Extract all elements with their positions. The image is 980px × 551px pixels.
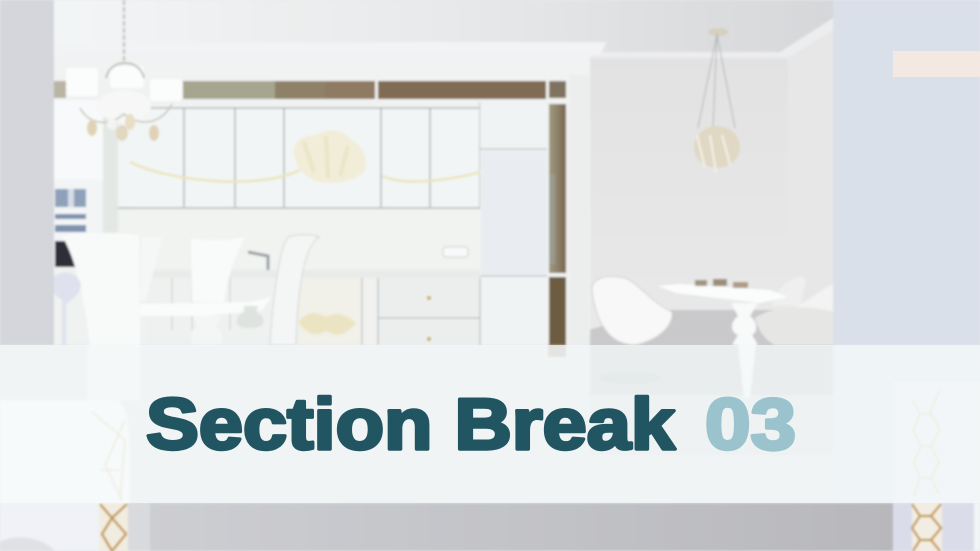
faucet	[248, 252, 268, 270]
floor gray below band	[150, 503, 893, 551]
dining table	[140, 297, 272, 345]
floor below band	[0, 345, 980, 551]
upper cabinets	[118, 100, 545, 345]
ceiling	[54, 0, 834, 60]
title number: 03: 03	[705, 385, 796, 465]
crown moulding right	[590, 18, 833, 58]
floor light area under band	[0, 345, 980, 503]
right sofa	[893, 382, 980, 551]
floor bright patch left	[128, 503, 150, 551]
cups on table	[695, 279, 748, 288]
gold garland	[130, 152, 545, 182]
dining floor	[588, 310, 833, 345]
gold ornament	[294, 130, 366, 183]
left sofa	[0, 400, 130, 551]
left wall panel	[0, 0, 54, 345]
fridge panel and oven	[54, 100, 103, 267]
dining chair centre	[191, 237, 245, 302]
title band	[0, 345, 980, 503]
reflection of dining set	[88, 345, 833, 455]
chandelier left	[66, 0, 182, 141]
title text: section break: Section Break	[146, 385, 676, 465]
lower cabinets	[148, 278, 480, 345]
chandelier right	[694, 28, 740, 172]
accent tab	[893, 51, 980, 77]
mirror strip top	[54, 81, 566, 99]
small round chair far left	[52, 272, 81, 345]
mirror column right	[549, 104, 566, 345]
right wall panel	[833, 0, 980, 345]
dining chair right	[270, 235, 319, 345]
dining room wall	[588, 55, 834, 345]
dining chair left back	[140, 237, 162, 300]
dining chair front	[62, 233, 140, 345]
title	[146, 385, 796, 465]
white shell chair	[592, 277, 672, 345]
counter	[148, 270, 480, 278]
kitchen wall	[54, 55, 590, 345]
side wall	[788, 30, 833, 345]
crown moulding left	[54, 42, 607, 55]
far chair	[772, 277, 806, 306]
right panel under band	[833, 345, 980, 503]
door frame	[570, 75, 589, 345]
backsplash	[118, 209, 480, 270]
tall cabinet column	[480, 102, 547, 345]
front chair by table	[755, 307, 833, 345]
header band	[54, 55, 590, 81]
round table	[658, 284, 788, 345]
wall socket	[443, 247, 468, 257]
side wall behind oven	[103, 100, 133, 235]
